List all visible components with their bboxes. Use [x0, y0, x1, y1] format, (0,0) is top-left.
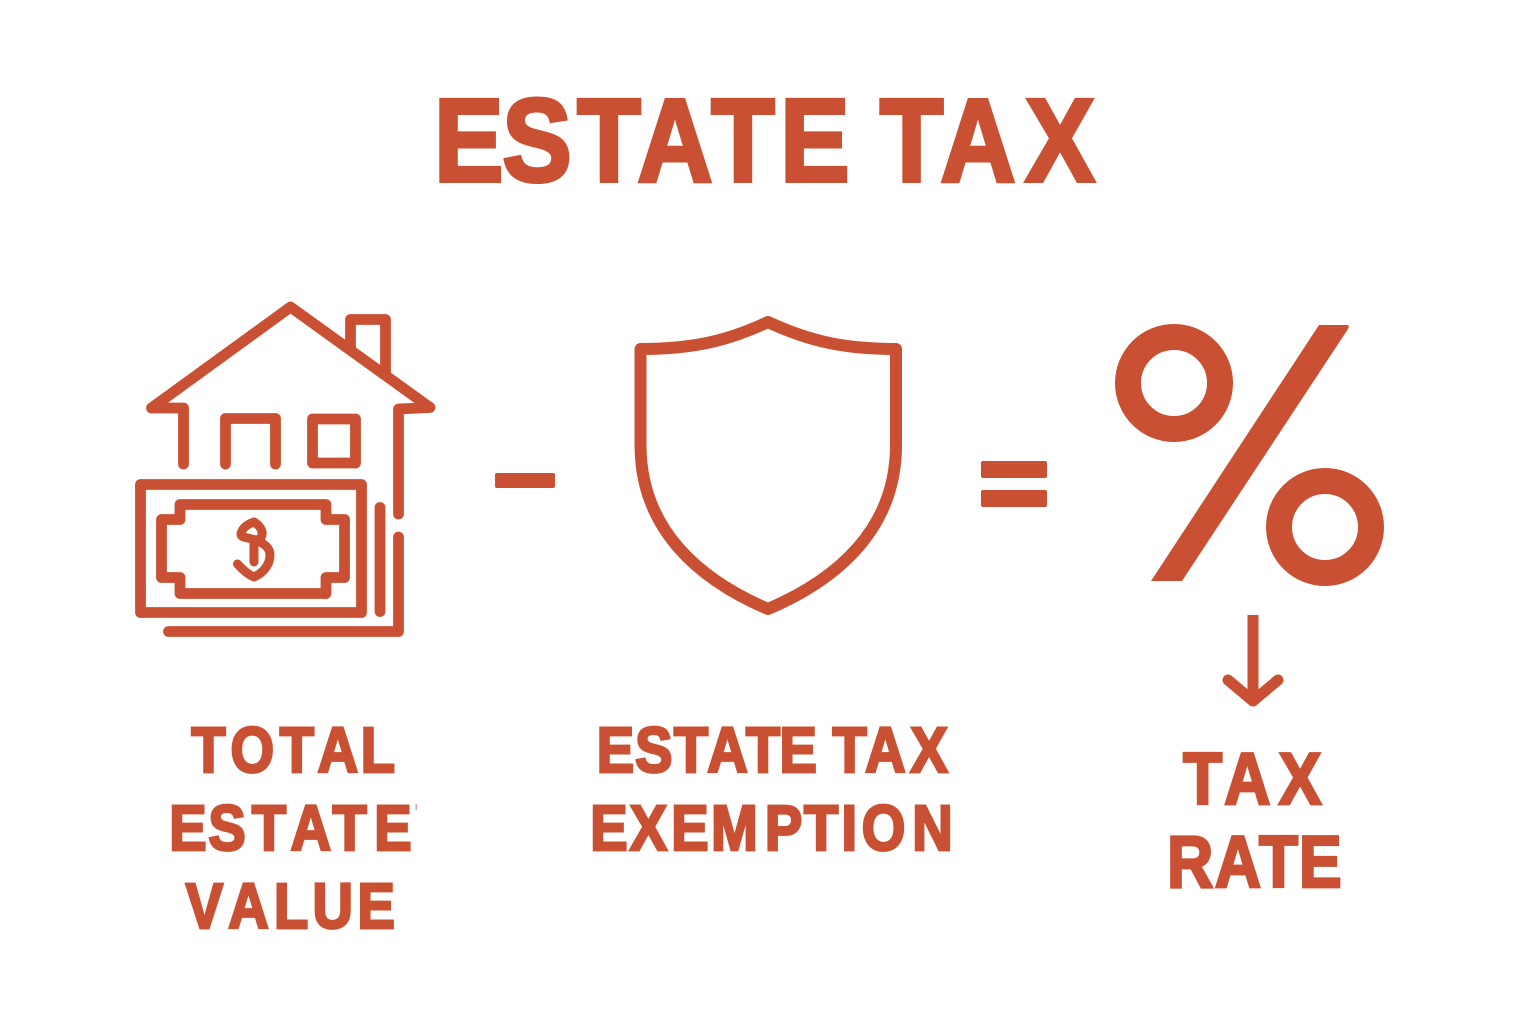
- banknote edge: [375, 508, 385, 612]
- arrow: down to tax rate: [1228, 615, 1278, 701]
- label: tax rate: TAX: [1183, 738, 1322, 820]
- banknote outer: [140, 484, 362, 612]
- banknote inner: [162, 504, 344, 594]
- label: total estate value: ESTATE: [169, 793, 412, 864]
- icon: percent: [1128, 325, 1371, 581]
- chimney: [350, 320, 386, 372]
- label: tax rate: [1167, 738, 1342, 903]
- label: estate tax exemption: ESTATE TAX: [597, 715, 948, 786]
- title: ESTATE TAX: [434, 74, 1095, 206]
- equals sign: [981, 461, 1047, 507]
- dollar sign: [238, 522, 270, 577]
- icon: house and money: [140, 307, 430, 632]
- label: total estate value: TOTAL: [191, 715, 395, 786]
- door: [226, 418, 276, 464]
- icon: shield: [640, 322, 896, 609]
- label: estate tax exemption: EXEMPTION: [590, 793, 953, 864]
- window: [312, 419, 356, 463]
- label: total estate value: [169, 715, 417, 942]
- label: estate tax exemption: [590, 715, 953, 864]
- house outline: [152, 307, 430, 632]
- label: total estate value: VALUE: [186, 871, 395, 942]
- minus sign: [495, 473, 555, 488]
- label: tax rate: RATE: [1167, 821, 1342, 903]
